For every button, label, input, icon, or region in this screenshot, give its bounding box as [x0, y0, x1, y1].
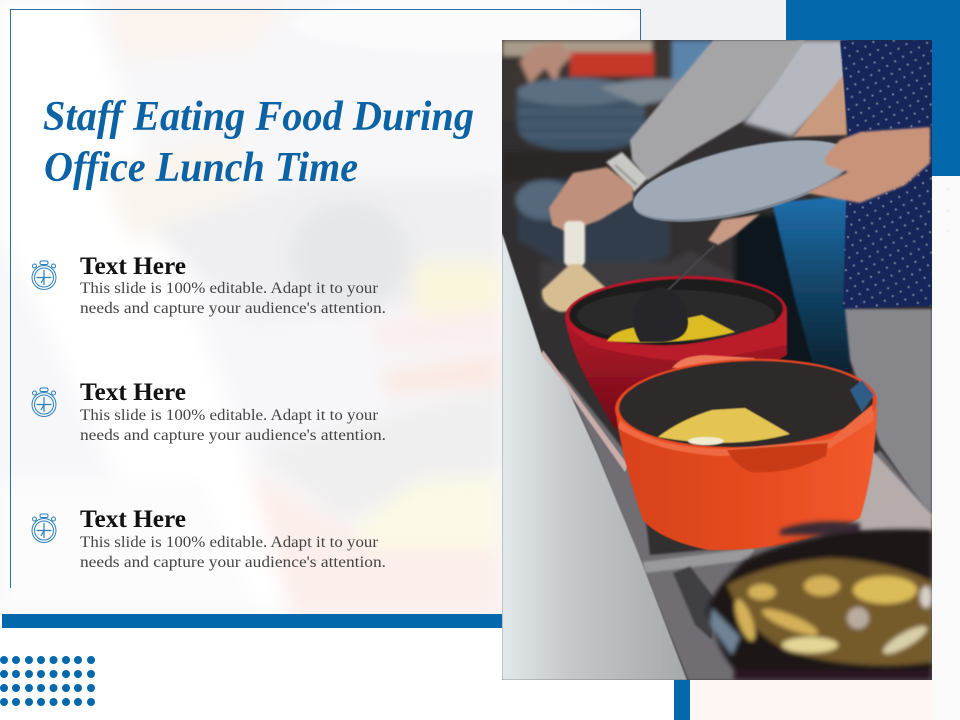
icon: stopwatch [32, 514, 56, 542]
sweater arm [630, 40, 805, 180]
title: Staff Eating Food During [43, 94, 474, 140]
grey counter edge [502, 233, 687, 680]
spatula [542, 221, 608, 312]
description 3: needs and capture your audience's attention. [80, 554, 386, 571]
item 3 [32, 506, 386, 571]
ladle [633, 244, 716, 342]
heading 3: Text Here [80, 506, 186, 533]
trousers [845, 309, 932, 520]
description 1 [80, 280, 386, 317]
heading 1: Text Here [80, 253, 186, 280]
left hand [549, 167, 633, 232]
red pot [564, 272, 788, 430]
tabletop [560, 370, 932, 680]
description 3: This slide is 100% editable. Adapt it to your [80, 534, 379, 551]
fingers under plate [708, 214, 760, 245]
orange pot [613, 354, 879, 550]
description 2 [80, 407, 386, 444]
blurred background: table, plates, hand [502, 40, 734, 308]
item 2 [32, 379, 386, 444]
dot grid [0, 656, 95, 706]
icon: stopwatch [32, 261, 56, 290]
blue block below photo [674, 680, 690, 720]
description 2: This slide is 100% editable. Adapt it to your [80, 407, 379, 424]
jeans [772, 195, 850, 372]
description 2: needs and capture your audience's attention. [80, 427, 386, 444]
watch [606, 152, 648, 192]
blue block top right [786, 0, 960, 176]
heading 2: Text Here [80, 379, 186, 406]
navy shirt [840, 40, 932, 309]
black pot with food [707, 522, 932, 680]
small white dots right [946, 187, 950, 233]
dark legs [735, 215, 850, 375]
description 1: This slide is 100% editable. Adapt it to your [80, 280, 379, 297]
outline frame [10, 10, 640, 588]
item 1 [32, 253, 386, 317]
light shirt behind [743, 40, 850, 137]
icon: stopwatch [32, 388, 56, 416]
title: Office Lunch Time [44, 145, 358, 191]
blue bar bottom [2, 614, 502, 628]
plate [632, 139, 846, 222]
counter strip [540, 350, 628, 472]
photo: serving food from pots [502, 40, 932, 680]
title [43, 94, 474, 191]
faint panel right and bottom [690, 176, 960, 720]
faded background photo [0, 0, 786, 614]
right hand [807, 127, 930, 203]
description 3 [80, 534, 386, 571]
forearm [793, 73, 847, 137]
description 1: needs and capture your audience's attention. [80, 300, 386, 317]
